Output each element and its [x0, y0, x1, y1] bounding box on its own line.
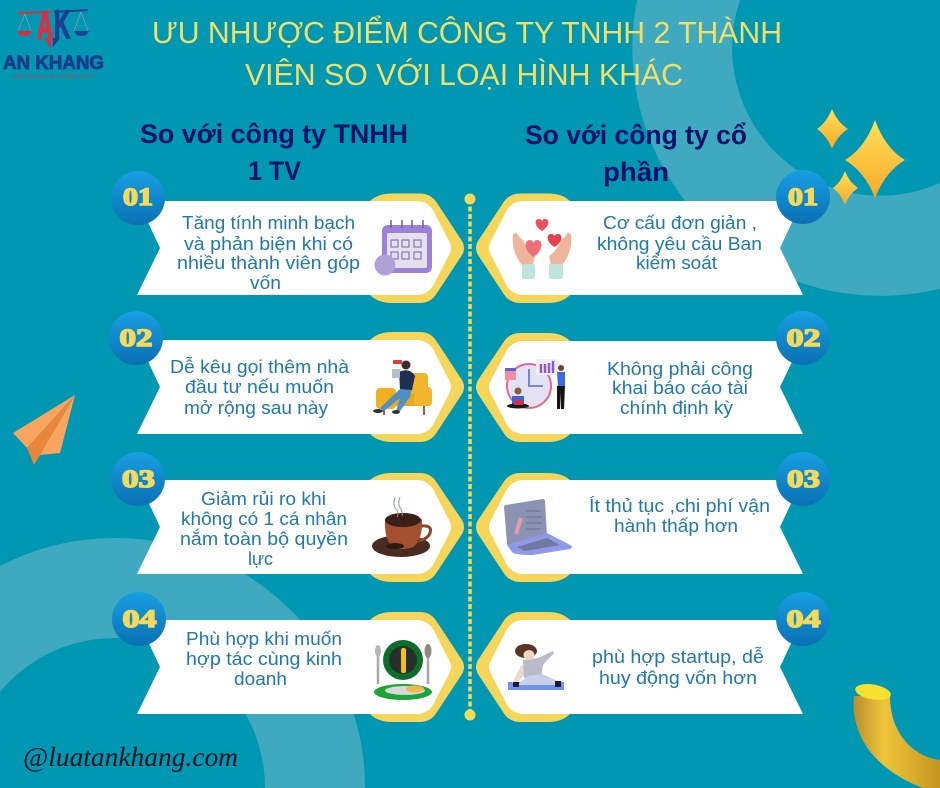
text: right 04 — [592, 646, 764, 688]
text: right 03 — [589, 496, 770, 536]
badge 01: 01 — [788, 184, 818, 211]
background ring: top right — [632, 0, 940, 296]
text: left 02 — [170, 356, 350, 418]
text: left 04 — [186, 629, 342, 689]
yellow tube decoration — [854, 681, 940, 788]
panel: left 02 — [109, 311, 464, 442]
background ring: bottom left — [0, 538, 365, 788]
heading: right column: phần — [603, 157, 669, 187]
panel: left 01 — [111, 171, 464, 303]
text: left 01: vốn — [250, 273, 281, 293]
text: left 01: nhiều thành viên góp — [177, 253, 360, 273]
icon: hands with hearts — [513, 219, 571, 279]
heading: left column: So với công ty TNHH — [140, 119, 408, 149]
text: right 01 — [597, 213, 762, 273]
heading: right column — [525, 120, 747, 187]
website handle: @luatankhang.com — [23, 742, 238, 772]
badge 04: 04 — [786, 606, 821, 633]
text: right 02: chính định kỳ — [620, 398, 733, 418]
text: right 01: kiểm soát — [636, 253, 717, 273]
panel: left 04 — [112, 592, 464, 722]
text: left 03: không có 1 cá nhân — [181, 509, 347, 529]
badge 02 — [776, 311, 830, 365]
logo: An Khang: A — [37, 3, 53, 48]
badge 02: 02 — [786, 325, 820, 352]
icon: plates and cutlery — [374, 640, 432, 700]
title — [152, 15, 782, 92]
text: right 02: khai báo cáo tài — [612, 378, 748, 398]
icon: calendar — [374, 220, 432, 276]
icon: stretching woman — [508, 644, 564, 690]
text: right 01: Cơ cấu đơn giản , — [603, 213, 757, 233]
text: right 02 — [607, 359, 753, 418]
badge 04 — [776, 592, 830, 646]
text: left 04: hợp tác cùng kinh — [186, 649, 342, 669]
text: left 02: mở rộng sau này — [184, 398, 328, 418]
panel: right 01 — [476, 170, 830, 303]
heading: right column: So với công ty cổ — [525, 120, 747, 150]
panel: left 03 — [111, 452, 464, 582]
sparkles — [817, 109, 905, 205]
title: VIÊN SO VỚI LOẠI HÌNH KHÁC — [245, 57, 683, 92]
text: left 03: lực — [248, 549, 273, 569]
paper plane — [13, 395, 75, 465]
logo: An Khang: AN KHANG — [3, 53, 104, 74]
badge 03: 03 — [787, 466, 820, 493]
icon: clock with people — [505, 359, 565, 409]
logo: An Khang — [3, 2, 104, 79]
badge 02: 02 — [120, 325, 152, 352]
text: left 03: Giảm rủi ro khi — [201, 489, 326, 509]
text: right 01: không yêu cầu Ban — [597, 234, 762, 254]
icon: coffee cup — [372, 497, 431, 557]
badge 02 — [109, 311, 163, 365]
heading: left column: 1 TV — [248, 156, 301, 186]
panel: right 03 — [476, 452, 830, 582]
badge 04 — [112, 592, 166, 646]
central dashed timeline — [464, 194, 476, 720]
heading: left column — [140, 119, 408, 186]
panel: right 04 — [476, 592, 830, 722]
icon: laptop — [504, 499, 572, 555]
text: right 04: huy động vốn hơn — [599, 668, 757, 688]
badge 01: 01 — [123, 184, 153, 211]
panel: right 02 — [476, 311, 830, 442]
text: left 02: đầu tư nếu muốn — [185, 377, 334, 397]
badge 01 — [776, 170, 830, 224]
badge 03 — [111, 452, 165, 506]
badge 03 — [776, 452, 830, 506]
text: right 04: phù hợp startup, dễ — [592, 646, 764, 667]
title: ƯU NHƯỢC ĐIỂM CÔNG TY TNHH 2 THÀNH — [152, 15, 782, 50]
badge 04: 04 — [122, 606, 157, 633]
text: left 02: Dễ kêu gọi thêm nhà — [170, 356, 350, 377]
text: right 03: Ít thủ tục ,chi phí vận — [589, 496, 770, 516]
icon: person on yellow armchair — [373, 360, 432, 415]
badge 01 — [111, 171, 165, 225]
text: left 01 — [177, 213, 360, 293]
text: left 04: Phù hợp khi muốn — [186, 629, 342, 649]
badge 03: 03 — [122, 466, 155, 493]
logo: An Khang: HIỆU QUẢ NHANH - ĐỊA CHỈ TRỌNG TIN CẬY — [13, 72, 94, 79]
text: left 01: Tăng tính minh bạch — [182, 213, 355, 233]
logo: An Khang: K — [54, 2, 71, 47]
text: left 04: doanh — [234, 669, 287, 689]
text: right 02: Không phải công — [607, 359, 753, 379]
text: left 03: nắm toàn bộ quyền — [180, 528, 348, 549]
text: left 01: và phản biện khi có — [184, 234, 353, 254]
text: left 03 — [180, 489, 348, 569]
text: right 03: hành thấp hơn — [614, 516, 738, 536]
